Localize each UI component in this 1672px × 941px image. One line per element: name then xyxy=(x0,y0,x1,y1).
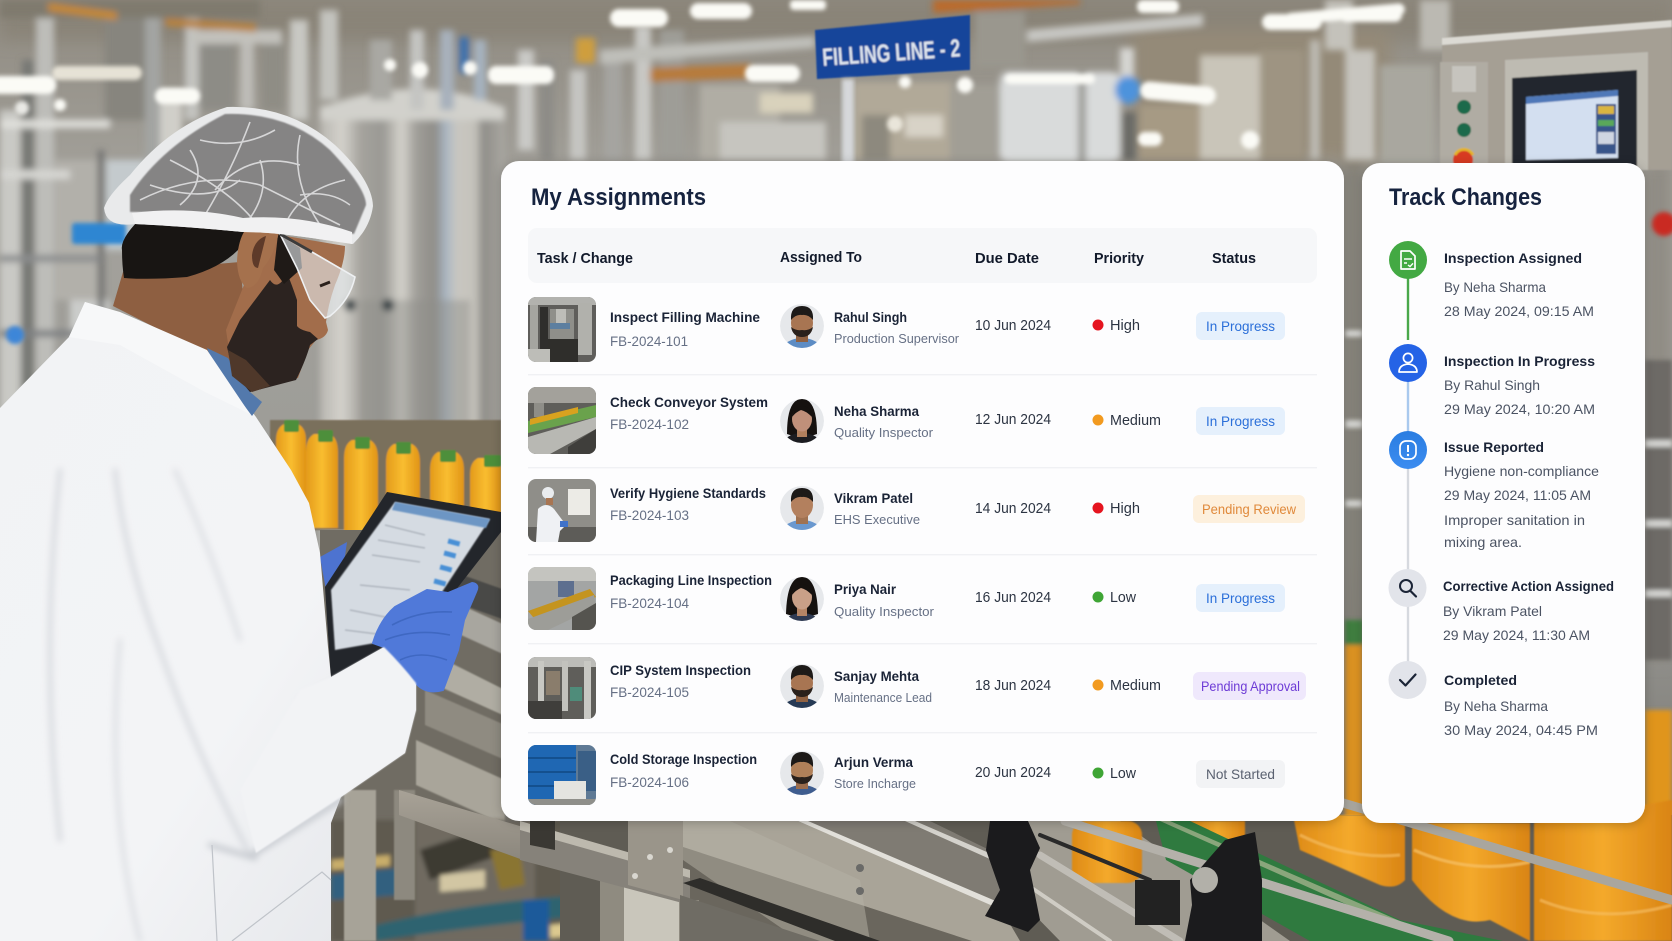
due date: 12 Jun 2024 xyxy=(975,412,1051,428)
row: check conveyor system: Neha Sharma xyxy=(834,403,919,419)
step: inspection assigned: 28 May 2024, 09:15 AM xyxy=(1444,303,1594,319)
priority: high xyxy=(1092,501,1140,517)
step: inspection assigned: By Neha Sharma xyxy=(1444,279,1546,295)
status: pending approval: Pending Approval xyxy=(1201,678,1300,694)
row: check conveyor system: FB-2024-102 xyxy=(610,416,689,432)
task text: Inspect Filling Machine xyxy=(610,309,760,325)
priority: medium: Medium xyxy=(1110,678,1161,694)
row: packaging line inspection: FB-2024-104 xyxy=(610,595,689,611)
step: issue reported: Hygiene non-compliance xyxy=(1444,463,1599,479)
thumbnail: conveyor xyxy=(528,387,596,454)
row: packaging line inspection: Priya Nair xyxy=(834,581,897,597)
thumbnail: filling machine xyxy=(528,297,596,362)
right side strip details xyxy=(1345,212,1672,830)
orange bottles xyxy=(1072,800,1672,941)
row: cip system inspection xyxy=(528,657,1306,724)
table header: Priority xyxy=(1094,250,1145,267)
task text: Cold Storage Inspection xyxy=(610,751,757,767)
coat sleeve cuff xyxy=(240,647,416,853)
icon: document xyxy=(1389,241,1427,279)
step: inspection in progress xyxy=(1389,344,1595,417)
priority: low: Low xyxy=(1110,766,1137,782)
icon: alert xyxy=(1389,431,1427,469)
status: in progress: In Progress xyxy=(1206,590,1275,606)
status: pending review xyxy=(1193,495,1305,523)
juice bottles behind tablet xyxy=(270,420,501,558)
priority: low: Low xyxy=(1110,590,1137,606)
icon: magnifier xyxy=(1388,569,1426,607)
step: completed: By Neha Sharma xyxy=(1444,698,1548,714)
step: corrective action assigned: Corrective Action Assigned xyxy=(1443,578,1614,594)
step: corrective action assigned: 29 May 2024, 11:30 AM xyxy=(1443,627,1590,643)
row: inspect filling machine xyxy=(528,297,1285,364)
step: completed: Completed xyxy=(1444,672,1517,688)
step: issue reported xyxy=(1389,431,1599,550)
row: check conveyor system xyxy=(528,387,1285,457)
row: verify hygiene standards: Vikram Patel xyxy=(834,490,913,506)
blue tag xyxy=(72,223,126,244)
task text: Packaging Line Inspection xyxy=(610,572,772,588)
table header xyxy=(528,228,1317,283)
thumbnail: packaging line xyxy=(528,567,596,630)
beard xyxy=(227,273,318,392)
hair xyxy=(122,222,245,279)
row: verify hygiene standards: EHS Executive xyxy=(834,512,920,527)
thumbnail: cold storage xyxy=(528,745,596,805)
priority: high xyxy=(1092,318,1140,334)
task text: CIP System Inspection xyxy=(610,662,751,678)
timeline line grey xyxy=(1407,468,1409,672)
row: packaging line inspection xyxy=(528,567,1285,635)
status: in progress: In Progress xyxy=(1206,318,1275,334)
row: verify hygiene standards xyxy=(528,479,1305,546)
timeline line green xyxy=(1407,278,1409,340)
row: packaging line inspection: Quality Inspector xyxy=(834,604,935,619)
thumbnail: cip system xyxy=(528,657,596,719)
priority: low xyxy=(1092,590,1137,606)
sign: filling line: FILLING LINE - 2 xyxy=(821,34,961,72)
heading: track changes: Track Changes xyxy=(1389,184,1542,211)
step: issue reported: Issue Reported xyxy=(1444,439,1544,455)
priority: high: High xyxy=(1110,501,1140,517)
step: issue reported: 29 May 2024, 11:05 AM xyxy=(1444,487,1591,503)
icon: check xyxy=(1388,661,1426,699)
face xyxy=(226,232,345,388)
shirt xyxy=(207,348,262,416)
status: not started: Not Started xyxy=(1206,766,1275,782)
step: completed xyxy=(1388,661,1598,738)
thumbnail: hygiene inspector xyxy=(528,479,596,542)
icon: person xyxy=(1389,344,1427,382)
due date: 16 Jun 2024 xyxy=(975,590,1051,606)
table header: Task / Change xyxy=(537,250,633,267)
status: in progress xyxy=(1196,584,1285,612)
row: inspect filling machine: FB-2024-101 xyxy=(610,333,688,349)
step: inspection assigned xyxy=(1389,241,1594,319)
control panel machine xyxy=(1440,20,1672,172)
coat body xyxy=(0,302,416,941)
step: completed: 30 May 2024, 04:45 PM xyxy=(1444,722,1598,738)
row: inspect filling machine: Production Supervisor xyxy=(834,331,960,346)
left posts xyxy=(344,790,376,941)
heading: my assignments: My Assignments xyxy=(531,184,706,211)
row: cold storage inspection: FB-2024-106 xyxy=(610,774,689,790)
neck xyxy=(113,262,250,370)
row: cip system inspection: Sanjay Mehta xyxy=(834,668,919,684)
green conveyor xyxy=(1156,821,1503,941)
status: in progress xyxy=(1196,312,1285,340)
pocket xyxy=(212,845,331,941)
worker xyxy=(0,107,501,941)
status: in progress xyxy=(1196,407,1285,435)
step: inspection assigned: Inspection Assigned xyxy=(1444,250,1582,266)
status: pending review: Pending Review xyxy=(1202,501,1297,517)
panel: my assignments xyxy=(501,161,1344,821)
avatar: arjun verma xyxy=(780,751,824,795)
glove behind tablet xyxy=(320,542,347,590)
table header: Status xyxy=(1212,250,1256,267)
step: issue reported: Improper sanitation in xyxy=(1444,512,1585,528)
sign post xyxy=(842,79,854,164)
glove front xyxy=(373,583,477,691)
hairnet xyxy=(104,107,373,244)
avatar: rahul singh xyxy=(780,304,824,348)
avatar: sanjay mehta xyxy=(780,664,824,708)
step: inspection in progress: By Rahul Singh xyxy=(1444,377,1540,393)
due date: 20 Jun 2024 xyxy=(975,765,1051,781)
step: corrective action assigned: By Vikram Patel xyxy=(1443,603,1542,619)
avatar: priya nair xyxy=(780,577,824,621)
collar xyxy=(69,302,250,414)
row: verify hygiene standards: FB-2024-103 xyxy=(610,507,689,523)
conveyor bottom centre and right xyxy=(399,790,1672,941)
task text: Verify Hygiene Standards xyxy=(610,485,766,501)
due date: 18 Jun 2024 xyxy=(975,678,1051,694)
priority: high: High xyxy=(1110,318,1140,334)
priority: low xyxy=(1092,766,1137,782)
due date: 10 Jun 2024 xyxy=(975,318,1051,334)
tablet xyxy=(325,492,501,680)
row: check conveyor system: Quality Inspector xyxy=(834,425,934,440)
conveyor bottom left xyxy=(320,530,596,941)
avatar: vikram patel xyxy=(780,486,824,530)
timeline line blue xyxy=(1407,380,1409,434)
table header: Due Date xyxy=(975,250,1039,267)
priority: medium: Medium xyxy=(1110,413,1161,429)
ear xyxy=(237,219,279,288)
row: cip system inspection: FB-2024-105 xyxy=(610,684,689,700)
rails xyxy=(1020,803,1672,941)
sign: filling line xyxy=(815,15,970,79)
status: not started xyxy=(1196,760,1285,788)
task text: Check Conveyor System xyxy=(610,394,768,410)
row: cold storage inspection xyxy=(528,745,1285,811)
row: cold storage inspection: Store Incharge xyxy=(834,776,916,791)
due date: 14 Jun 2024 xyxy=(975,501,1051,517)
row: cold storage inspection: Arjun Verma xyxy=(834,754,913,770)
table header: Assigned To xyxy=(780,249,862,266)
row: cip system inspection: Maintenance Lead xyxy=(834,690,932,705)
ceiling lights xyxy=(0,0,1405,149)
clamps xyxy=(985,821,1262,941)
step: corrective action assigned xyxy=(1388,569,1614,643)
step: issue reported: mixing area. xyxy=(1444,534,1522,550)
panel: track changes xyxy=(1362,163,1645,823)
goggles xyxy=(280,234,355,318)
avatar: neha sharma xyxy=(780,399,824,443)
step: inspection in progress: 29 May 2024, 10:20 AM xyxy=(1444,401,1595,417)
row: inspect filling machine: Rahul Singh xyxy=(834,309,907,325)
step: inspection in progress: Inspection In Progress xyxy=(1444,353,1595,369)
status: in progress: In Progress xyxy=(1206,413,1275,429)
status: pending approval xyxy=(1193,672,1306,700)
